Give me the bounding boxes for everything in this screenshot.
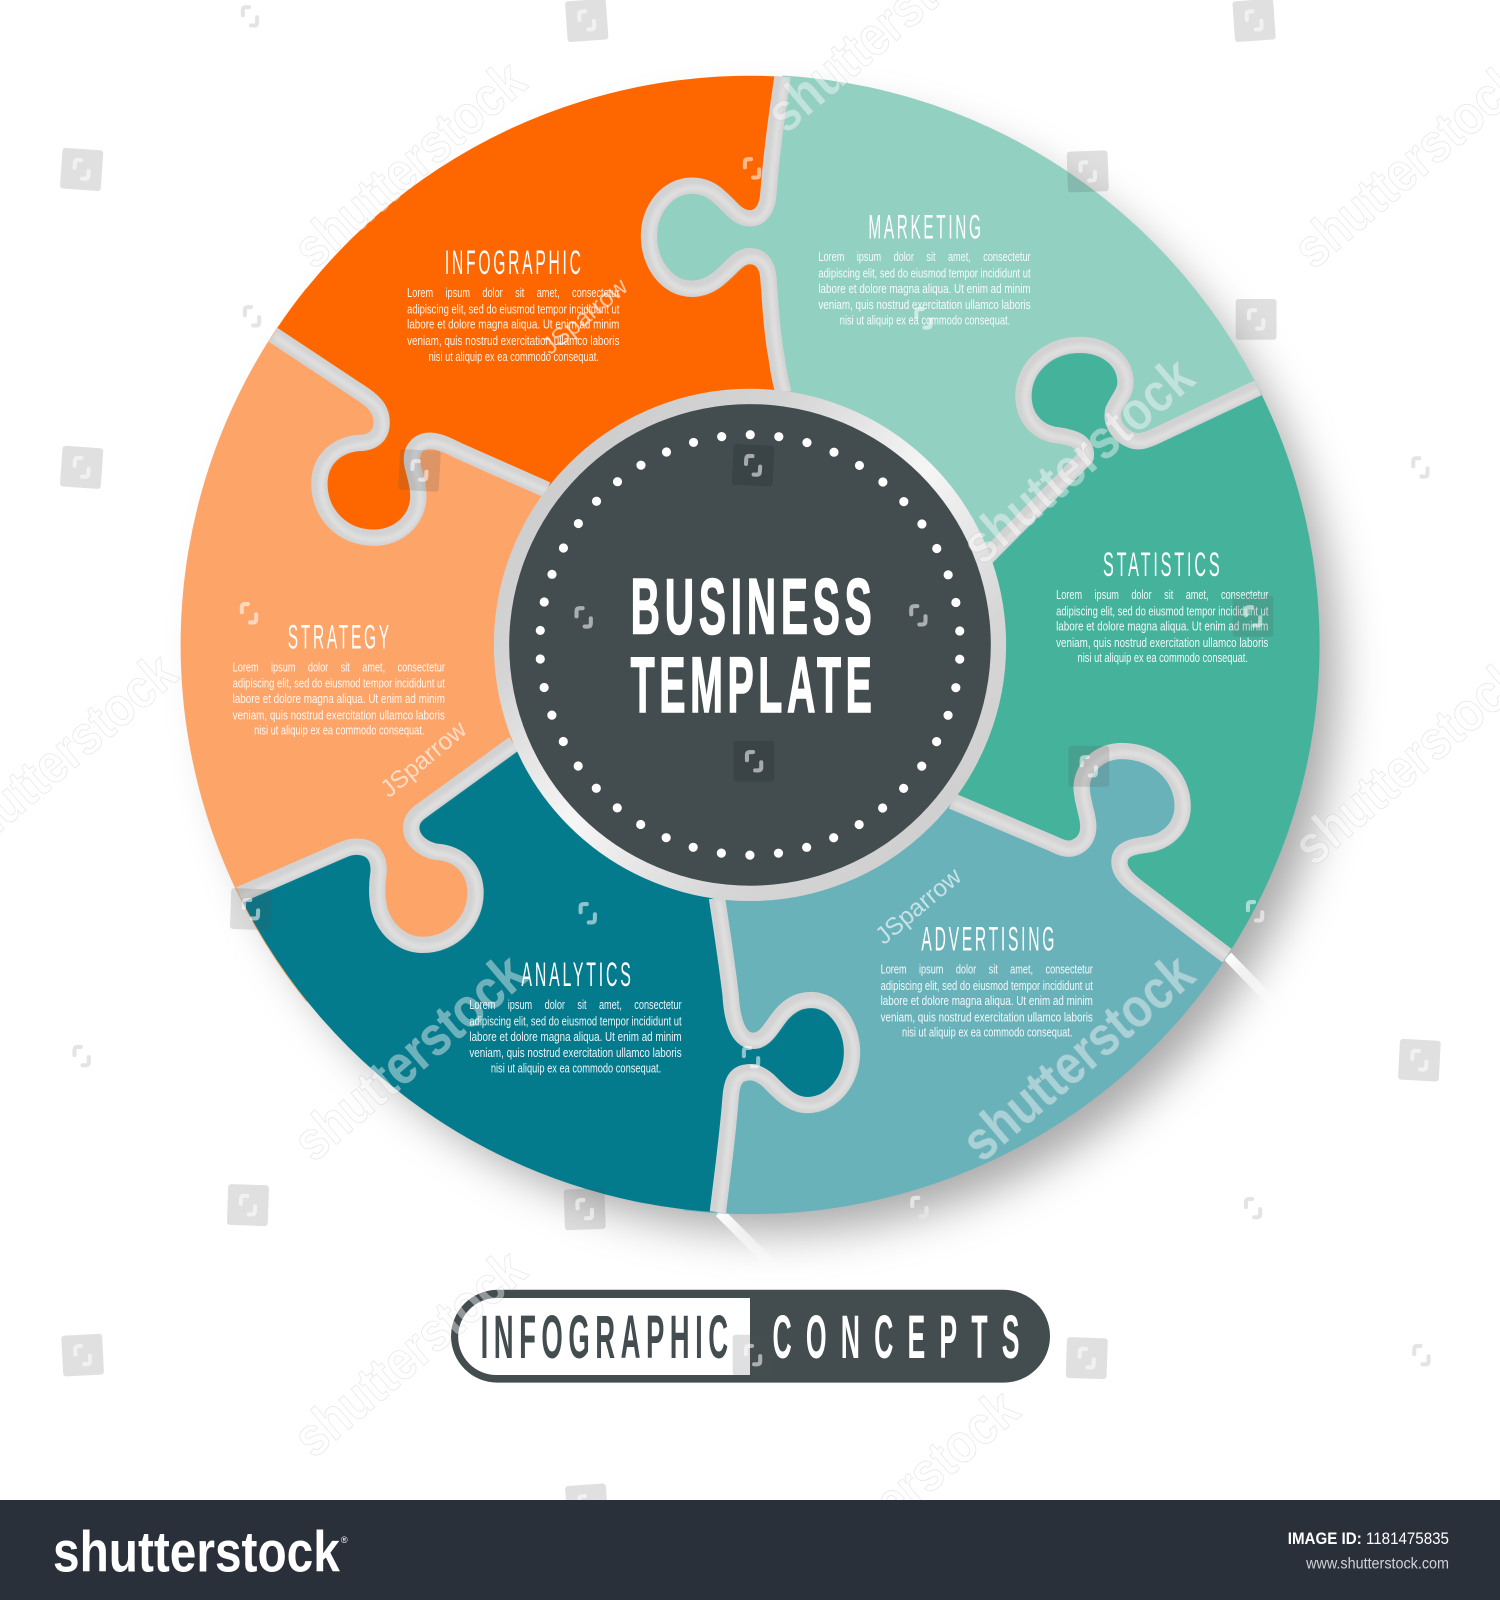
watermark overlay: JSparrow: [375, 716, 472, 803]
watermark overlay: shutterstock: [281, 48, 537, 280]
text block: strategy: nisi ut aliquip ex ea commodo consequat.: [254, 723, 424, 738]
text block: statistics: veniam, quis nostrud exercitation ullamco laboris: [1056, 635, 1269, 650]
text block: infographic: veniam, quis nostrud exercitation ullamco laboris: [407, 333, 620, 348]
pill: infographic concepts: [451, 1290, 1050, 1383]
piece: marketing (mint): [649, 76, 1296, 645]
text block: advertising: ADVERTISING: [921, 921, 1057, 959]
piece: analytics (dark teal): [239, 645, 852, 1212]
dotted circle: [540, 435, 960, 855]
text block: strategy: STRATEGY: [288, 618, 392, 656]
title: business template: TEMPLATE: [631, 641, 877, 729]
text block: statistics: labore et dolore magna aliqua. Ut enim ad minim: [1056, 619, 1268, 634]
text block: infographic: nisi ut aliquip ex ea commodo consequat.: [429, 349, 599, 364]
drop shadow of puzzle wheel: [214, 109, 1337, 1232]
shadow cut lines: [719, 956, 1288, 1273]
text block: analytics: veniam, quis nostrud exercitation ullamco laboris: [469, 1045, 682, 1060]
centre badge: [502, 397, 998, 893]
text block: infographic: [407, 244, 620, 364]
text block: marketing: Lorem ipsum dolor sit amet, consectetur: [818, 249, 1031, 264]
text block: strategy: [233, 618, 445, 738]
text block: marketing: [818, 208, 1031, 327]
text block: analytics: adipiscing elit, sed do eiusmod tempor incididunt ut: [469, 1014, 682, 1029]
ring: [502, 397, 998, 893]
text block: analytics: labore et dolore magna aliqua. Ut enim ad minim: [469, 1029, 682, 1044]
watermark overlay: JSparrow: [870, 863, 967, 950]
text block: statistics: STATISTICS: [1103, 546, 1222, 584]
text block: marketing: labore et dolore magna aliqua. Ut enim ad minim: [818, 281, 1031, 296]
text block: infographic: INFOGRAPHIC: [445, 244, 584, 282]
text block: marketing: adipiscing elit, sed do eiusmod tempor incididunt ut: [818, 266, 1031, 281]
footer bar: [0, 1500, 1500, 1600]
text block: advertising: Lorem ipsum dolor sit amet, consectetur: [881, 961, 1093, 976]
text: CONCEPTS: [772, 1303, 1034, 1371]
text block: analytics: Lorem ipsum dolor sit amet, consectetur: [469, 997, 682, 1012]
text block: marketing: veniam, quis nostrud exercitation ullamco laboris: [818, 297, 1031, 312]
puzzle wheel: [181, 76, 1320, 1214]
text block: statistics: nisi ut aliquip ex ea commodo consequat.: [1078, 650, 1248, 665]
puzzle seams: [239, 76, 1260, 1214]
piece: statistics (green teal): [750, 345, 1320, 989]
text block: statistics: adipiscing elit, sed do eiusmod tempor incididunt ut: [1056, 603, 1269, 618]
text block: marketing: MARKETING: [868, 208, 984, 246]
text block: advertising: nisi ut aliquip ex ea commodo consequat.: [902, 1025, 1072, 1040]
watermark overlay: shutterstock: [281, 1237, 537, 1469]
text block: advertising: [881, 921, 1093, 1040]
text block: analytics: [469, 956, 682, 1075]
watermark overlay: JSparrow: [537, 273, 633, 360]
piece: strategy (peach): [181, 288, 750, 1002]
text block: strategy: labore et dolore magna aliqua. Ut enim ad minim: [233, 691, 445, 706]
footer image id: IMAGE ID: 1181475835: [1288, 1530, 1449, 1548]
pill: infographic concepts: INFOGRAPHIC: [481, 1303, 734, 1371]
text block: statistics: [1056, 546, 1269, 665]
text block: marketing: nisi ut aliquip ex ea commodo consequat.: [840, 312, 1010, 327]
text block: infographic: adipiscing elit, sed do eiusmod tempor incididunt ut: [407, 301, 620, 316]
text block: strategy: Lorem ipsum dolor sit amet, consectetur: [233, 659, 445, 674]
piece: advertising (light blue): [684, 645, 1228, 1214]
piece: infographic (orange): [273, 76, 816, 645]
text block: advertising: adipiscing elit, sed do eiusmod tempor incididunt ut: [881, 978, 1093, 993]
text block: analytics: nisi ut aliquip ex ea commodo consequat.: [491, 1060, 661, 1075]
text block: infographic: labore et dolore magna aliqua. Ut enim ad minim: [407, 317, 619, 332]
text block: strategy: veniam, quis nostrud exercitation ullamco laboris: [233, 707, 445, 722]
title: business template: BUSINESS: [631, 563, 877, 651]
footer logo: shutterstock: [53, 1520, 340, 1584]
watermark overlay: shutterstock: [949, 941, 1206, 1173]
footer url: www.shutterstock.com: [1305, 1555, 1449, 1572]
dark disc: [509, 404, 991, 886]
pill white section: [458, 1298, 750, 1375]
title: business template: [631, 563, 877, 729]
text block: strategy: adipiscing elit, sed do eiusmod tempor incididunt ut: [233, 676, 445, 691]
watermark overlay: shutterstock: [281, 941, 537, 1173]
text block: advertising: labore et dolore magna aliqua. Ut enim ad minim: [881, 993, 1093, 1008]
footer registered mark: ®: [341, 1535, 348, 1545]
text block: advertising: veniam, quis nostrud exercitation ullamco laboris: [881, 1009, 1093, 1024]
text block: statistics: Lorem ipsum dolor sit amet, consectetur: [1056, 587, 1269, 602]
pill body: [451, 1290, 1050, 1383]
watermark overlay: shutterstock: [949, 344, 1206, 576]
text block: infographic: Lorem ipsum dolor sit amet, consectetur: [407, 285, 620, 300]
text block: analytics: ANALYTICS: [521, 956, 634, 994]
